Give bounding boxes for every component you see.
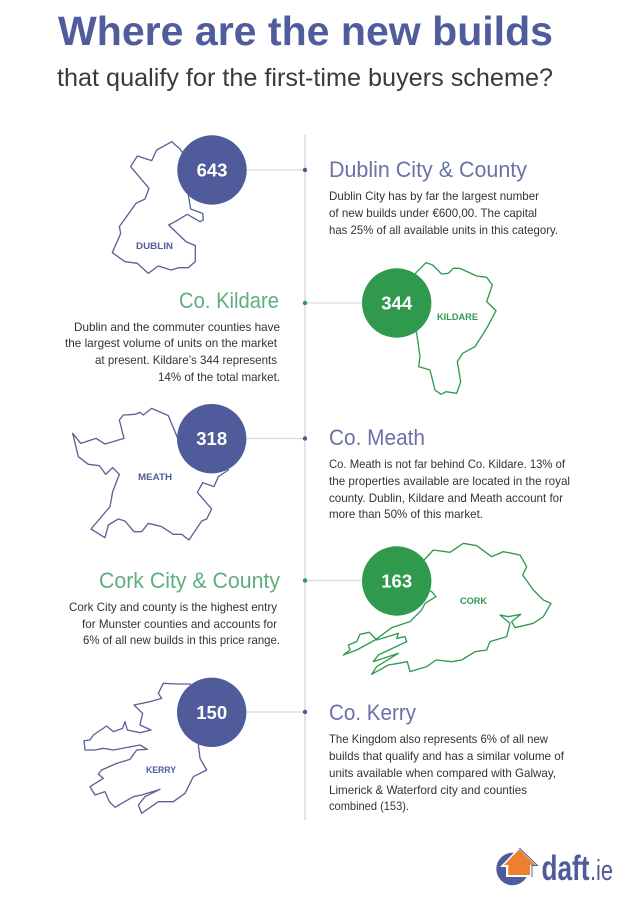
number circle: 318: [177, 404, 246, 473]
text: Kildare description: Dublin and the commuter counties have: [74, 320, 280, 334]
number circle: 150: 150: [196, 702, 227, 723]
map: Meath outline: [73, 408, 228, 540]
number circle: 163: [362, 546, 431, 616]
text: Kerry description: The Kingdom also represents 6% of all new: [329, 732, 548, 746]
number circle: 318: 318: [196, 428, 227, 449]
number circle: 150: [177, 678, 246, 747]
text: Kerry description: builds that qualify and has a similar volume of: [329, 749, 565, 763]
panel: Cork: [69, 543, 551, 674]
text: Cork description: [69, 600, 280, 647]
timeline axis: [304, 135, 306, 820]
panel: Meath: [73, 404, 570, 540]
text: Cork description: Cork City and county is the highest entry: [69, 600, 277, 614]
logo: daft.ie: [496, 847, 613, 888]
heading: Co. Kildare: Co. Kildare: [179, 288, 279, 313]
wordmark: daft: [542, 849, 590, 888]
map: Kildare outline: [407, 263, 496, 394]
text: Meath description: more than 50% of this market.: [329, 507, 483, 521]
text: Dublin description: of new builds under €600,00. The capital: [329, 206, 537, 220]
text: Kerry description: Limerick & Waterford city and counties: [329, 783, 527, 797]
text: Meath description: Co. Meath is not far behind Co. Kildare. 13% of: [329, 457, 566, 471]
panel: Dublin: [112, 135, 558, 273]
heading: Cork City & County: Cork City & County: [99, 568, 281, 593]
panel: Kerry: [84, 678, 565, 813]
text: Dublin description: has 25% of all available units in this category.: [329, 223, 558, 237]
logo: daft.ie: .ie: [590, 855, 613, 887]
number circle: 643: 643: [197, 160, 227, 180]
text: Meath description: county. Dublin, Kildare and Meath account for: [329, 491, 563, 505]
map: Dublin outline: [112, 142, 203, 273]
number circle: 344: 344: [381, 292, 413, 314]
text: Kildare description: at present. Kildare’s 344 represents: [95, 353, 277, 367]
text: Cork description: 6% of all new builds in this price range.: [83, 633, 280, 647]
text: Dublin description: [329, 189, 558, 237]
panel: Kildare: [65, 263, 496, 394]
heading: Co. Kerry: Co. Kerry: [329, 700, 417, 725]
subtitle: that qualify for the first-time buyers scheme?: [57, 64, 553, 92]
icon: house in circle: [496, 847, 539, 885]
text: Meath description: [329, 457, 570, 521]
map: Cork outline: [343, 543, 551, 674]
heading: Dublin City & County: Dublin City & County: [329, 157, 528, 182]
map label: KILDARE: KILDARE: [437, 312, 478, 323]
number circle: 643: [177, 135, 247, 205]
text: Cork description: for Munster counties and accounts for: [82, 617, 277, 631]
map: Kerry outline: [84, 683, 210, 813]
text: Kildare description: 14% of the total market.: [158, 370, 280, 384]
map label: CORK: CORK: [460, 596, 487, 607]
text: Kildare description: [65, 320, 280, 384]
text: Kerry description: units available when compared with Galway,: [329, 766, 556, 780]
heading: Co. Meath: Co. Meath: [329, 425, 425, 450]
number circle: 163: 163: [381, 570, 412, 592]
text: Kerry description: [329, 732, 565, 813]
map label: KERRY: KERRY: [146, 765, 177, 776]
title: Where are the new builds: [58, 8, 553, 54]
text: Kerry description: combined (153).: [329, 799, 409, 813]
number circle: 344: [362, 268, 431, 338]
text: Kildare description: the largest volume of units on the market: [65, 336, 278, 350]
map label: DUBLIN: DUBLIN: [136, 241, 173, 252]
map label: MEATH: MEATH: [138, 472, 172, 483]
text: Meath description: the properties available are located in the royal: [329, 474, 570, 488]
text: Dublin description: Dublin City has by far the largest number: [329, 189, 539, 203]
